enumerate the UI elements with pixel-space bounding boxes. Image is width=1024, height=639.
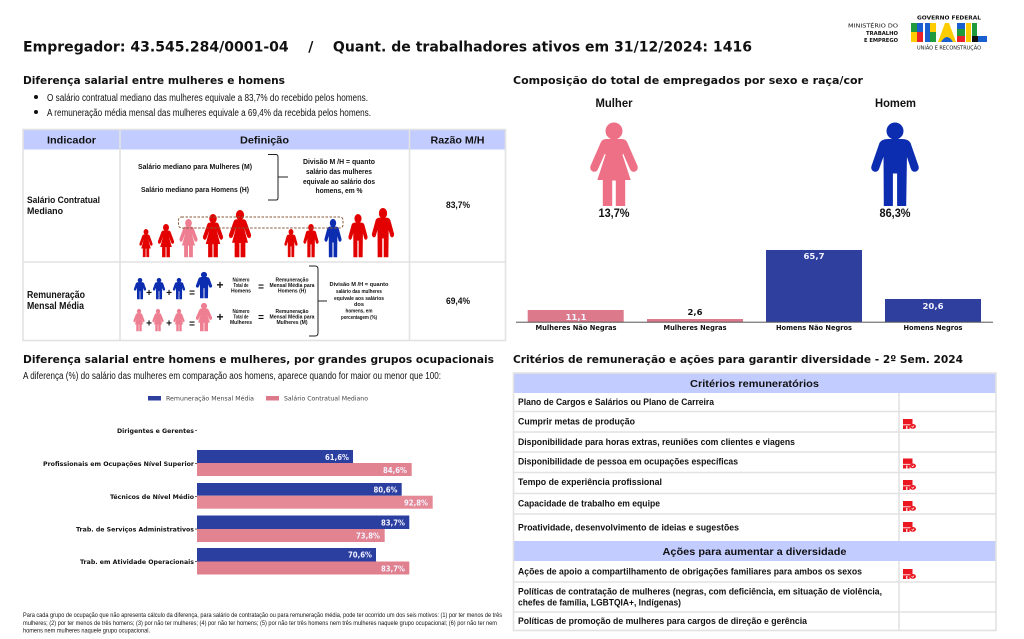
equation: homens: +: [216, 278, 224, 292]
equation: mulheres: Mulheres: [230, 320, 252, 326]
row label: salário contratual mediano: Salário Contratual: [27, 195, 100, 206]
definition text: divisão M/H: equivale aos salários: [334, 296, 384, 302]
section header: ações: Ações para aumentar a diversidade: [662, 546, 847, 558]
category labels: Trab. em Atividade Operacionais: [80, 558, 194, 566]
bar chart: sexo e raça/cor: 11,1: [566, 313, 587, 322]
equation: homens: Total de: [234, 283, 249, 289]
row labels: Disponibilidade para horas extras, reuniões com clientes e viagens: [518, 437, 795, 447]
bar chart: sexo e raça/cor: Mulheres Não Negras: [536, 324, 616, 332]
bar values: 80,6%: [374, 486, 398, 494]
row label: remuneração mensal média: Remuneração: [27, 290, 85, 301]
row label: remuneração mensal média: Mensal Média: [27, 301, 84, 312]
row labels: Tempo de experiência profissional: [518, 477, 662, 487]
definition text: salário mediano: Salário mediano para Mulheres (M): [138, 164, 252, 171]
row labels: Cumprir metas de produção: [518, 416, 635, 426]
bar values: 83,7%: [381, 518, 405, 528]
logo: Governo Federal Brasil: [911, 16, 987, 52]
equation: homens: =: [258, 282, 264, 293]
row label: salário contratual mediano: [27, 195, 100, 217]
equation: mulheres: =: [189, 319, 195, 330]
definition text: divisão M/H: salário das mulheres: [306, 169, 372, 176]
equation: homens: Homens: [231, 288, 251, 294]
equation: mulheres: Mensal Média para: [270, 314, 315, 320]
bar values: 84,6%: [383, 466, 407, 475]
row label: salário contratual mediano: Mediano: [27, 206, 63, 217]
value: 69,4%: 69,4%: [446, 296, 470, 307]
dashed median marker: [178, 217, 343, 228]
pictogram: mulher 13,7%: Mulher: [596, 98, 633, 110]
equation: homens: +: [146, 288, 152, 299]
equation: mulheres: [134, 303, 315, 331]
equation: mulheres: +: [166, 318, 172, 330]
logo: Ministério do Trabalho e Emprego: E EMPREGO: [864, 38, 898, 44]
row labels: Proatividade, desenvolvimento de ideias e sugestões: [518, 522, 739, 532]
bar chart: sexo e raça/cor: 20,6: [922, 302, 944, 311]
row labels: Políticas de contratação de mulheres (negras, com deficiência, em situação de violência,: [518, 586, 882, 596]
chart legend: [148, 394, 368, 402]
equation: homens: Remuneração: [276, 278, 308, 284]
definition text: salário mediano: [138, 164, 252, 194]
bar chart: sexo e raça/cor: Mulheres Negras: [664, 324, 726, 332]
bar values: 83,7%: [381, 564, 405, 574]
brace: [309, 266, 327, 336]
bar chart: sexo e raça/cor: 65,7: [804, 252, 824, 261]
equation: mulheres: =: [258, 312, 264, 324]
footnote: Para cada grupo de ocupação que não apresenta cálculo da diferença, para salário de contratação ou para remuneração média, pode ter ocorrido um dos seis motivos: (1) por ter menos de três: [23, 612, 503, 619]
bar values: 61,6%: [325, 453, 349, 462]
row labels: [518, 397, 882, 626]
bar chart: sexo e raça/cor: Homens Não Negros: [776, 324, 852, 332]
icons: mulheres em ordem de salário: [140, 211, 251, 257]
row labels: Políticas de promoção de mulheres para cargos de direção e gerência: [518, 616, 808, 626]
category labels: Trab. de Serviços Administrativos: [76, 526, 194, 534]
footnote: mulheres; (2) por ter menos de três homens; (3) por não ter mulheres; (4) por não ter homens; (5) por não ter três homens nem três mulheres naquele grupo ocupacional; (6) por não ter nem: [23, 620, 497, 627]
subtitle: A diferença (%) do salário das mulheres em comparação aos homens, aparece quando for maior ou menor que 100:: [23, 371, 441, 382]
logo: Governo Federal Brasil: GOVERNO FEDERAL: [917, 16, 981, 22]
row label: remuneração mensal média: [27, 290, 85, 312]
equation: homens: Número: [232, 278, 250, 284]
brace: [268, 154, 288, 200]
equation: mulheres: Remuneração: [276, 309, 308, 315]
bar chart: sexo e raça/cor: 2,6: [688, 308, 703, 317]
section header: critérios remuneratórios: Critérios remuneratórios: [690, 378, 819, 390]
definition text: divisão M/H: homens, em %: [316, 188, 363, 195]
bar values: [325, 453, 428, 574]
pictogram: mulher 13,7%: 13,7%: [598, 208, 630, 220]
heading: critérios: Critérios de remuneração e ações para garantir diversidade - 2º Sem. 2024: [513, 353, 963, 366]
value: 83,7%: 83,7%: [446, 200, 470, 211]
table header: Indicador: [47, 134, 96, 146]
equation: mulheres: Número: [232, 309, 250, 315]
row labels: Ações de apoio a compartilhamento de obrigações familiares para ambos os sexos: [518, 566, 862, 576]
category labels: Técnicos de Nível Médio: [110, 493, 195, 501]
bullet list: [34, 93, 371, 119]
equation: homens: =: [189, 288, 195, 299]
footnote: homens nem mulheres naquele grupo ocupacional.: [23, 628, 150, 634]
definition text: divisão M/H: Divisão M /H = quanto: [303, 159, 375, 166]
bar chart: sexo e raça/cor: [516, 250, 993, 332]
equation: mulheres: +: [216, 310, 224, 324]
title: Empregador: 43.545.284/0001-04 / Quant. de trabalhadores ativos em 31/12/2024: 1416: [23, 40, 752, 56]
panel: critérios e ações: [514, 373, 996, 630]
chart legend: Remuneração Mensal Média: [166, 394, 254, 402]
logo: Governo Federal Brasil: UNIÃO E RECONSTRUÇÃO: [917, 44, 981, 52]
heading: diferença salarial: Diferença salarial entre mulheres e homens: [23, 74, 285, 87]
equation: homens: +: [166, 288, 172, 299]
pictogram: homem 86,3%: [872, 98, 918, 220]
logo: Ministério do Trabalho e Emprego: MINISTÉRIO DO: [848, 22, 898, 30]
panel: tabela de indicadores: [23, 130, 506, 340]
row labels: Plano de Cargos e Salários ou Plano de Carreira: [518, 397, 715, 407]
category labels: [43, 427, 195, 566]
category labels: Dirigentes e Gerentes: [117, 427, 194, 435]
bullet list: A remuneração média mensal das mulheres equivale a 69,4% da recebida pelos homens.: [47, 108, 371, 119]
bar values: 92,8%: [404, 498, 428, 508]
category labels: Profissionais em Ocupações Nível Superior: [43, 460, 195, 468]
definition text: divisão M/H: equivale ao salário dos: [303, 179, 375, 186]
icons: homens em ordem de salário: [285, 209, 394, 257]
pictogram: homem 86,3%: Homem: [875, 98, 916, 110]
logo: Ministério do Trabalho e Emprego: [848, 22, 898, 44]
definition text: divisão M/H: [330, 282, 389, 321]
definition text: divisão M/H: [303, 159, 375, 195]
logo: Ministério do Trabalho e Emprego: TRABALHO: [866, 31, 898, 37]
bullet list: O salário contratual mediano das mulheres equivale a 83,7% do recebido pelos homens.: [47, 93, 368, 104]
table header: Definição: [240, 134, 289, 146]
icons: critério marcado: [903, 419, 916, 579]
row labels: Capacidade de trabalho em equipe: [518, 498, 660, 508]
definition text: divisão M/H: dos: [354, 302, 364, 308]
bars: [197, 450, 433, 574]
heading: composição: Composição do total de empregados por sexo e raça/cor: [513, 74, 864, 87]
equation: homens: Mensal Média para: [270, 283, 315, 289]
pictogram: mulher 13,7%: [591, 98, 637, 220]
row labels: Disponibilidade de pessoa em ocupações específicas: [518, 456, 738, 466]
equation: homens: Homens (H): [278, 288, 306, 294]
bar chart: sexo e raça/cor: Homens Negros: [904, 324, 962, 332]
footnote: [23, 612, 503, 634]
pictogram: homem 86,3%: 86,3%: [880, 208, 910, 220]
chart legend: Salário Contratual Mediano: [284, 394, 368, 402]
definition text: divisão M/H: homens, em: [346, 308, 373, 314]
bar chart: grupos ocupacionais: [43, 427, 433, 574]
equation: homens: [134, 272, 315, 299]
equation: mulheres: +: [146, 318, 152, 330]
heading: grandes grupos ocupacionais: Diferença salarial entre homens e mulheres, por grandes grupos ocupacionais: [23, 353, 494, 366]
equation: mulheres: Total de: [234, 314, 249, 320]
bar values: 70,6%: [348, 550, 372, 560]
definition text: divisão M/H: porcentagem (%): [341, 315, 377, 321]
bar values: 73,8%: [356, 532, 380, 540]
equation: mulheres: Mulheres (M): [276, 320, 308, 326]
table header: [47, 134, 484, 146]
definition text: salário mediano: Salário mediano para Homens (H): [141, 187, 249, 194]
definition text: divisão M/H: salário das mulheres: [336, 289, 382, 295]
definition text: divisão M/H: Divisão M /H = quanto: [330, 282, 389, 288]
row labels: chefes de família, LGBTQIA+, Indígenas): [518, 598, 681, 608]
table header: Razão M/H: [430, 134, 484, 146]
